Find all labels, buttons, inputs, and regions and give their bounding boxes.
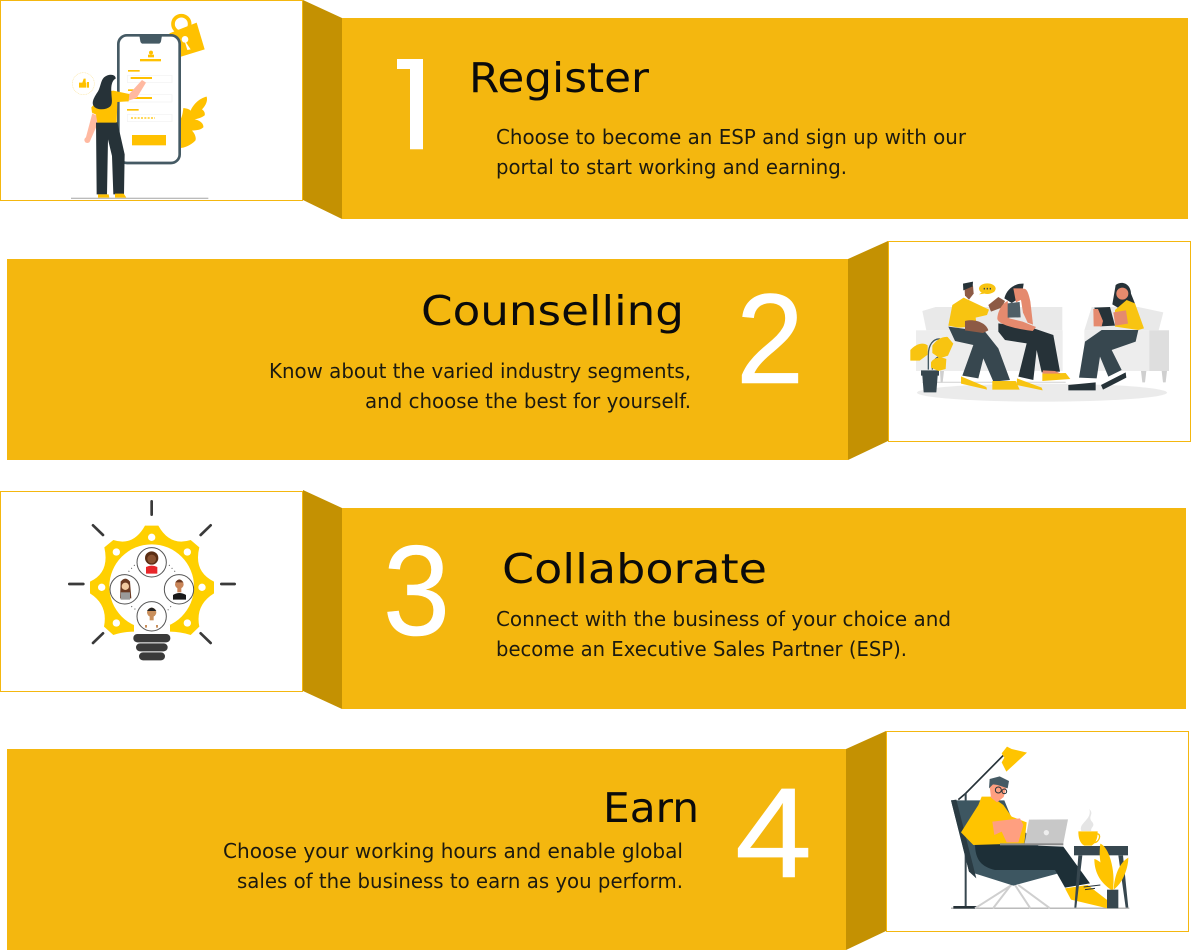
step 4 illustration panel — [886, 732, 1188, 932]
step 4 description: Choose your working hours and enable global — [223, 839, 683, 863]
step 4 description: sales of the business to earn as you perform. — [237, 869, 683, 893]
step 3 number: 3 — [383, 520, 450, 663]
plant — [910, 337, 953, 392]
person: woman on sofa — [997, 284, 1070, 390]
step 4 description — [223, 839, 683, 893]
person: woman with tablet — [1068, 283, 1144, 390]
step 1 number: 1 — [378, 34, 449, 177]
step 4 number: 4 — [735, 762, 812, 905]
step 2 heading: Counselling — [421, 287, 684, 335]
step 3 band — [303, 490, 1186, 709]
step 2 band — [7, 241, 888, 460]
step 1 description: portal to start working and earning. — [496, 155, 847, 179]
step 3 description: Connect with the business of your choice and — [496, 607, 951, 631]
step 2 number: 2 — [736, 268, 804, 411]
step 3 description: become an Executive Sales Partner (ESP). — [496, 637, 907, 661]
step 1 band — [303, 0, 1188, 219]
step 4 heading: Earn — [603, 784, 699, 832]
step 1 illustration panel — [0, 0, 302, 200]
step 1 heading: Register — [469, 54, 649, 102]
person: man on sofa — [948, 282, 1020, 390]
step 2 illustration panel — [888, 242, 1190, 442]
step 3 description — [496, 607, 951, 661]
step 3 heading: Collaborate — [502, 545, 767, 593]
step 2 description — [269, 359, 691, 413]
step 4 band — [7, 731, 886, 950]
step 2 description: and choose the best for yourself. — [365, 389, 691, 413]
step 1 description: Choose to become an ESP and sign up with our — [496, 125, 967, 149]
step 2 description: Know about the varied industry segments, — [269, 359, 691, 383]
step 3 illustration panel — [0, 492, 302, 692]
step 1 description — [496, 125, 967, 179]
